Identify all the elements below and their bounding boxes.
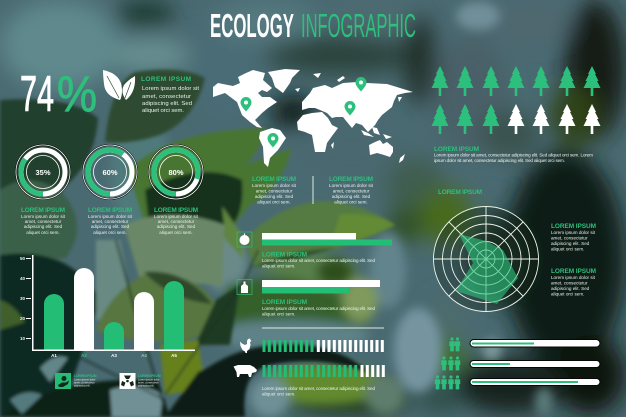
- legend item 2: Lorem ipsum dolor: [138, 378, 160, 382]
- livestock note: [262, 386, 375, 396]
- bar chart: 30: [20, 296, 25, 301]
- map caption left: aliquet orci sem.: [257, 200, 291, 204]
- tree caption: LOREM IPSUM: [434, 146, 479, 153]
- donut caption 3: amet, consectetur: [158, 219, 195, 224]
- big stat 74%: %: [57, 66, 97, 122]
- donut 35%: [16, 145, 70, 199]
- horizontal bars group 1: aliquet orci sem.: [262, 264, 295, 268]
- bar chart: 50: [20, 256, 25, 261]
- map caption left: [252, 176, 297, 204]
- legend item 1: LOREM IPSUM: [74, 374, 97, 378]
- text block: leaf caption: aliquet orci sem.: [142, 108, 184, 114]
- bar chart: [20, 255, 195, 358]
- horizontal bars group 2: aliquet orci sem.: [262, 312, 295, 316]
- radar note 2: aliquet orci sem.: [551, 292, 584, 296]
- radar note 2: [551, 268, 596, 296]
- horizontal bars group 1: LOREM IPSUM: [262, 252, 307, 258]
- segmented bar: pig: [262, 365, 385, 377]
- donut caption 1: [21, 207, 66, 235]
- bar chart: A3: [111, 353, 117, 358]
- donut 60%: 60%: [102, 168, 118, 177]
- map caption left: amet, consectetur: [256, 188, 293, 194]
- text block: leaf caption: Lorem ipsum dolor sit: [142, 86, 199, 92]
- donut 80%: [149, 145, 203, 199]
- segmented bar: chicken: [262, 340, 384, 352]
- horizontal bars group 2: LOREM IPSUM: [262, 299, 307, 306]
- big stat 74%: 74: [20, 66, 54, 122]
- people bar 2: [441, 356, 600, 370]
- radar note 2: amet, consectetur: [551, 280, 588, 286]
- radar note 1: aliquet orci sem.: [551, 246, 584, 252]
- bar chart: A4: [141, 353, 147, 358]
- text block: leaf caption: adipiscing elit. Sed: [142, 101, 192, 107]
- donut caption 1: aliquet orci sem.: [26, 230, 60, 235]
- map caption left: Lorem ipsum dolor sit: [252, 183, 297, 188]
- tree caption: ipsum dolor sit amet, consectetur adipiscing elit. Sed aliquet orci sem.: [434, 158, 565, 163]
- radar note 1: [551, 223, 596, 252]
- title: ECOLOGY: [210, 7, 294, 44]
- bar chart: 10: [20, 336, 25, 341]
- radar note 1: LOREM IPSUM: [551, 223, 596, 230]
- donut caption 2: amet, consectetur: [92, 219, 129, 224]
- donut caption 2: Lorem ipsum dolor sit: [88, 214, 133, 219]
- icon: bottle: [237, 280, 252, 294]
- donut caption 2: adipiscing elit. Sed: [91, 224, 130, 229]
- donut caption 2: LOREM IPSUM: [88, 207, 132, 214]
- radar note 2: Lorem ipsum dolor sit: [551, 275, 596, 280]
- icon: leaves: [103, 70, 135, 100]
- map caption right: LOREM IPSUM: [329, 176, 373, 183]
- legend item 2: LOREM IPSUM: [138, 374, 161, 378]
- tree pictogram: [432, 66, 600, 134]
- icon: pig: [234, 365, 257, 377]
- donut caption 1: LOREM IPSUM: [21, 207, 65, 214]
- map caption right: aliquet orci sem.: [334, 200, 368, 204]
- legend item 2: amet, consectetur: [138, 380, 159, 384]
- map caption left: adipiscing elit. Sed: [255, 194, 294, 199]
- donut caption 3: aliquet orci sem.: [159, 230, 193, 235]
- bar chart: A1: [51, 353, 57, 358]
- map caption right: amet, consectetur: [333, 188, 370, 194]
- icon: apple: [237, 232, 252, 247]
- radar note 1: amet, consectetur: [551, 236, 588, 240]
- world map: [213, 69, 413, 167]
- legend item 1: adipiscing elit.: [74, 384, 91, 388]
- people bar 1: [449, 337, 600, 351]
- donut caption 2: [88, 207, 133, 235]
- donut 35%: 35%: [35, 168, 51, 177]
- legend item 2: adipiscing elit.: [138, 384, 155, 388]
- legend item 2: [120, 373, 161, 389]
- donut caption 3: LOREM IPSUM: [154, 207, 198, 214]
- radar note 2: LOREM IPSUM: [551, 268, 596, 275]
- legend item 1: Lorem ipsum dolor: [74, 378, 96, 382]
- text block: leaf caption: amet, consectetur: [142, 94, 191, 100]
- map caption right: Lorem ipsum dolor sit: [329, 183, 374, 188]
- radar note 2: adipiscing elit. Sed: [551, 286, 590, 291]
- bar chart: 40: [20, 276, 25, 281]
- radar note 1: adipiscing elit. Sed: [551, 241, 590, 246]
- text block: leaf caption: LOREM IPSUM: [141, 76, 191, 83]
- livestock note: Lorem ipsum dolor sit amet, consectetur adipiscing elit. Sed: [262, 386, 375, 391]
- tree caption: Lorem ipsum dolor sit amet, consectetur adipiscing elit. Sed aliquet orci sem. Lorem: [434, 152, 593, 158]
- text block: leaf caption: [141, 76, 199, 114]
- bar chart: 20: [20, 316, 25, 321]
- donut caption 3: Lorem ipsum dolor sit: [154, 214, 199, 219]
- tree caption: [434, 146, 593, 163]
- legend item 1: amet, consectetur: [74, 380, 95, 384]
- map caption right: [329, 176, 374, 204]
- donut 60%: [83, 145, 137, 199]
- horizontal bars group 1: Lorem ipsum dolor sit amet, consectetur adipiscing elit. Sed: [262, 258, 375, 263]
- legend item 1: [55, 373, 97, 389]
- map caption left: LOREM IPSUM: [252, 176, 296, 183]
- horizontal bars group 2: [237, 280, 380, 316]
- radar note 1: Lorem ipsum dolor sit: [551, 230, 596, 235]
- donut caption 1: Lorem ipsum dolor sit: [21, 214, 66, 219]
- donut caption 1: amet, consectetur: [25, 219, 62, 224]
- donut caption 3: adipiscing elit. Sed: [157, 224, 196, 229]
- radar heading: LOREM IPSUM: [438, 189, 482, 196]
- donut caption 3: [154, 207, 199, 235]
- radar chart: [434, 206, 538, 312]
- horizontal bars group 1: [237, 232, 392, 268]
- bar chart: A5: [171, 353, 177, 358]
- map caption right: adipiscing elit. Sed: [332, 194, 371, 199]
- livestock note: aliquet orci sem.: [262, 392, 295, 396]
- icon: chicken: [240, 338, 252, 353]
- horizontal bars group 2: Lorem ipsum dolor sit amet, consectetur adipiscing elit. Sed: [262, 306, 375, 311]
- donut caption 2: aliquet orci sem.: [93, 230, 127, 235]
- people bar 3: [435, 375, 600, 389]
- bar chart: A2: [81, 353, 87, 358]
- donut caption 1: adipiscing elit. Sed: [24, 224, 63, 229]
- title: INFOGRAPHIC: [301, 7, 416, 44]
- donut 80%: 80%: [168, 168, 184, 177]
